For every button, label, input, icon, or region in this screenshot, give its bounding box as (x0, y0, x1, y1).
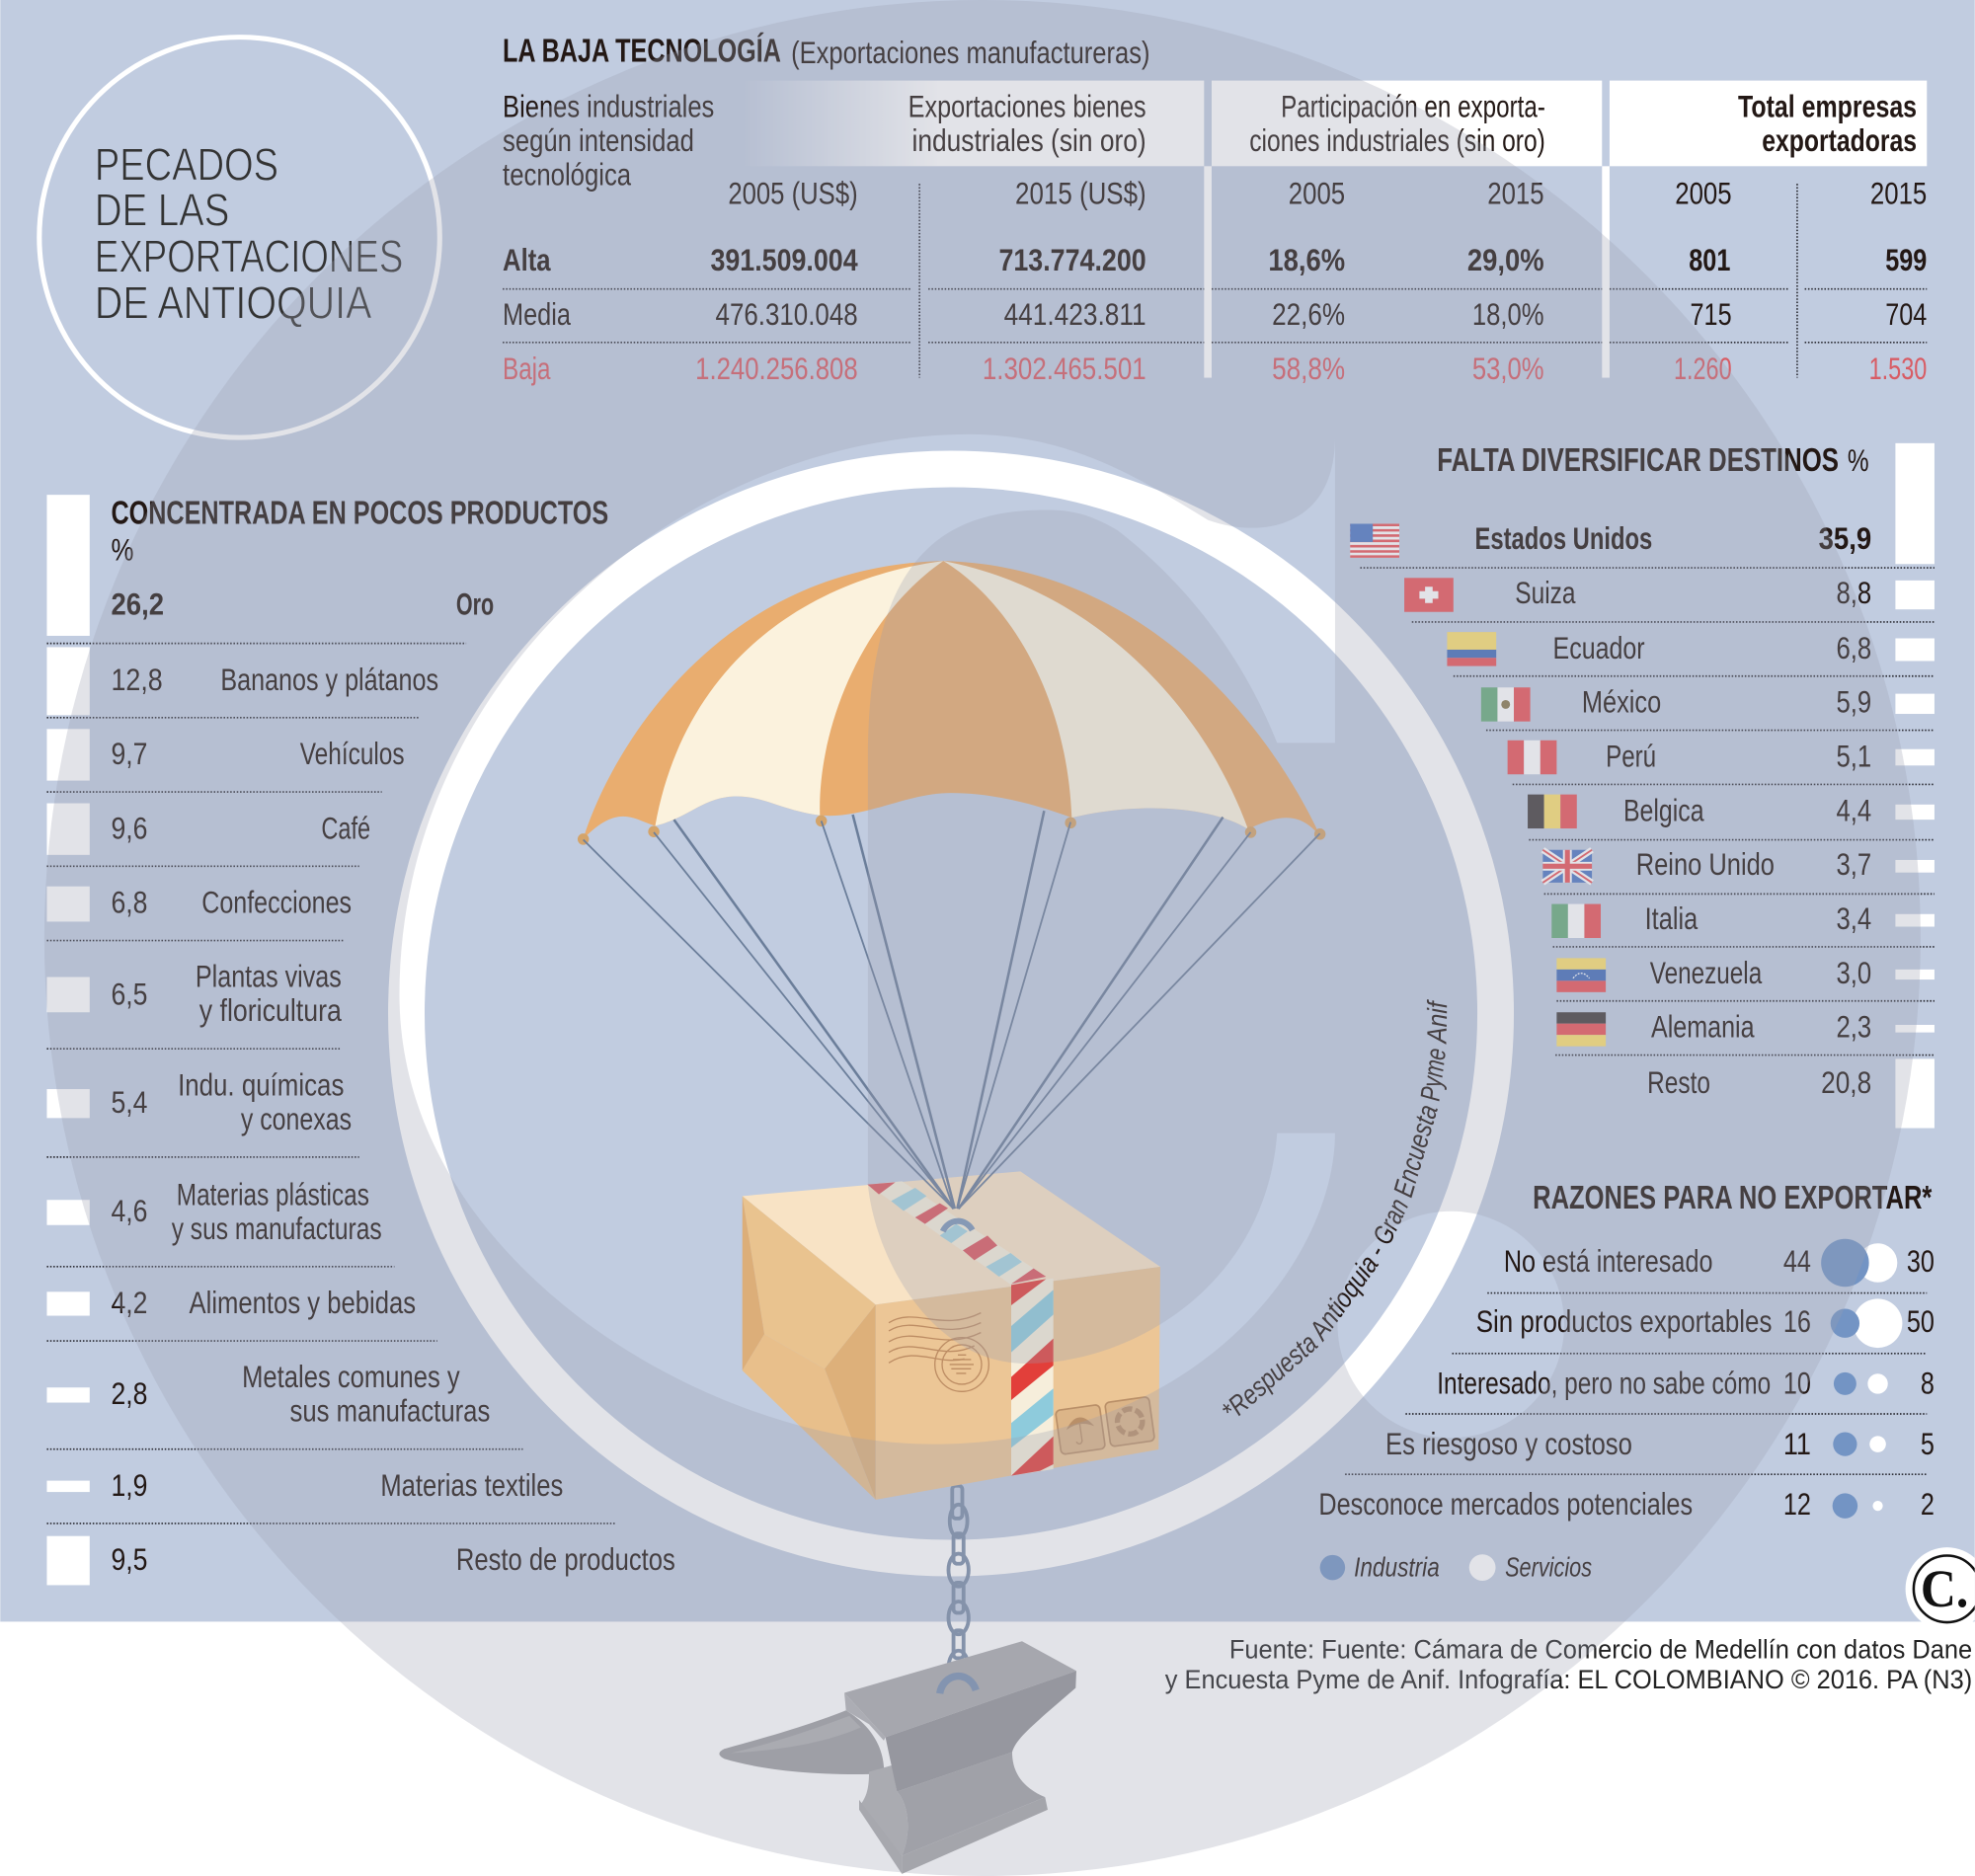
destination values: 8,8 (1836, 576, 1871, 610)
table row: alta: 391.509.004 (710, 243, 858, 277)
illustration: package (743, 1171, 1160, 1500)
legend: Servicios (1505, 1552, 1592, 1583)
flag: Reino Unido (1542, 850, 1592, 883)
survey source note along the ring: - (1361, 1240, 1391, 1262)
destination values: 6,8 (1836, 631, 1871, 665)
table row: baja: 1.240.256.808 (695, 352, 858, 386)
title text: PECADOS (95, 138, 278, 190)
anvil horn highlight (731, 1716, 861, 1754)
illustration: chain (948, 1486, 969, 1685)
anvil horn (719, 1710, 884, 1774)
product values: 1,9 (111, 1468, 147, 1503)
table row: baja: 1.260 (1674, 352, 1732, 386)
table row: media: 22,6% (1272, 297, 1345, 332)
reason values: 10 (1783, 1367, 1811, 1401)
table header text: Total empresas (1738, 90, 1917, 124)
product values: 26,2 (111, 586, 164, 621)
product labels: Resto de productos (456, 1542, 675, 1577)
reason values (1783, 1244, 1935, 1522)
product values: 9,5 (111, 1542, 147, 1577)
destination values: 20,8 (1821, 1065, 1871, 1100)
flag: Italia (1551, 904, 1601, 938)
product labels: Vehículos (300, 737, 405, 771)
white ring around the parachute (407, 469, 1496, 1558)
table years row: 2005 (1289, 177, 1345, 211)
product values: 4,2 (111, 1286, 147, 1320)
destination values: 4,4 (1836, 793, 1871, 827)
anvil base (859, 1797, 1048, 1874)
survey source note along the ring: Encuesta (1387, 1101, 1444, 1201)
flag: Mexico (1481, 687, 1531, 722)
table header cells (740, 81, 1927, 378)
product values: 9,7 (111, 737, 147, 771)
icon: recycle (1105, 1396, 1154, 1446)
destination values: 3,7 (1836, 847, 1871, 882)
flag: Ecuador (1447, 632, 1496, 666)
logo: El Colombiano C. (1906, 1547, 1975, 1630)
table row: media: 476.310.048 (716, 297, 858, 332)
destination labels: Reino Unido (1636, 847, 1775, 882)
illustration: parachute canopy (584, 561, 1320, 839)
table years row: 2015 (US$) (1015, 177, 1146, 211)
parachute anchor dots (578, 816, 1325, 845)
title text (95, 138, 403, 329)
icon: umbrella (1056, 1404, 1105, 1454)
reason labels (1318, 1244, 1772, 1522)
source credit (1165, 1634, 1972, 1694)
table header text: Bienes industriales (503, 90, 714, 124)
survey source note along the ring: Pyme (1415, 1047, 1452, 1103)
destination labels: Suiza (1515, 576, 1576, 610)
heading: productos (111, 494, 608, 567)
title text: DE LAS (95, 184, 229, 235)
table row: baja: 1.530 (1869, 352, 1927, 386)
product labels: y floricultura (199, 993, 342, 1028)
table row: baja: 1.302.465.501 (983, 352, 1146, 386)
reason labels: Sin productos exportables (1476, 1304, 1772, 1339)
heading: destinos: % (1848, 443, 1869, 478)
table header text: tecnológica (503, 157, 632, 192)
table row: baja: 53,0% (1472, 352, 1544, 386)
product labels: Café (321, 811, 370, 845)
logo: El Colombiano C.: C. (1921, 1559, 1968, 1618)
product labels: Metales comunes y (242, 1360, 460, 1394)
table row: media (503, 297, 1927, 332)
reason values: 12 (1783, 1487, 1811, 1522)
table row: alta (503, 243, 1927, 277)
title circle (40, 38, 439, 437)
destination labels: Ecuador (1553, 631, 1645, 665)
flag: Estados Unidos (1350, 523, 1399, 558)
reason labels: Interesado, pero no sabe cómo (1437, 1367, 1771, 1401)
table row: alta: 18,6% (1268, 243, 1345, 277)
table years row: 2015 (1870, 177, 1927, 211)
survey source note along the ring: *Respuesta (1216, 1327, 1323, 1427)
table row: baja: 58,8% (1272, 352, 1345, 386)
reason values: 16 (1783, 1304, 1811, 1339)
reason values: 44 (1783, 1244, 1811, 1279)
flag: Venezuela (1556, 958, 1606, 992)
destination values (1819, 521, 1871, 1100)
anvil waist (859, 1753, 1045, 1856)
destination values: 5,1 (1836, 740, 1871, 774)
survey source note along the ring: Antioquia (1303, 1249, 1384, 1346)
table row: alta: Alta (503, 243, 551, 277)
product labels: Oro (456, 586, 494, 621)
table header text (503, 90, 1917, 192)
product labels: sus manufacturas (290, 1394, 490, 1429)
survey source note along the ring: Gran (1367, 1194, 1414, 1249)
reason labels: Desconoce mercados potenciales (1318, 1487, 1693, 1522)
product labels: Confecciones (201, 885, 352, 919)
flag: Alemania (1556, 1012, 1606, 1047)
product labels: Indu. químicas (178, 1067, 344, 1102)
anvil block (844, 1641, 1076, 1792)
table row: baja (503, 352, 1927, 386)
product labels: Plantas vivas (196, 960, 342, 994)
product values: 6,8 (111, 885, 147, 919)
destination labels: Resto (1647, 1065, 1710, 1100)
product bars (46, 495, 90, 1585)
destination bars (1895, 443, 1935, 1129)
reason labels: Es riesgoso y costoso (1385, 1427, 1632, 1461)
product values: 9,6 (111, 811, 147, 845)
destination values: 2,3 (1836, 1010, 1871, 1045)
hook on package (943, 1221, 973, 1231)
destination labels: Perú (1606, 740, 1656, 774)
product values: 5,4 (111, 1085, 147, 1120)
reason bubbles: servicios (1854, 1243, 1902, 1511)
product labels: y conexas (241, 1102, 352, 1136)
title text: EXPORTACIONES (95, 230, 403, 281)
flag: Belgica (1528, 795, 1577, 828)
table row: media: 18,0% (1472, 297, 1544, 332)
hook on anvil (940, 1677, 976, 1693)
destination values: 35,9 (1819, 521, 1871, 556)
product values: 2,8 (111, 1376, 147, 1411)
table header text: Participación en exporta- (1281, 90, 1545, 124)
illustration: anvil (719, 1641, 1076, 1874)
product values: 6,5 (111, 977, 147, 1012)
panel: concentrada en pocos productos (46, 494, 675, 1585)
destination labels: Belgica (1623, 793, 1704, 827)
destination labels (1474, 521, 1775, 1100)
heading: destinos: FALTA DIVERSIFICAR DESTINOS (1437, 441, 1839, 479)
legend: Industria (1354, 1552, 1440, 1583)
destination labels: Italia (1645, 901, 1698, 936)
product labels (172, 586, 675, 1577)
product labels: Alimentos y bebidas (190, 1286, 416, 1320)
title text: DE ANTIOQUIA (95, 277, 372, 329)
product labels: Materias plásticas (177, 1177, 369, 1212)
table header text: Exportaciones bienes (908, 90, 1146, 124)
destination labels: Estados Unidos (1474, 521, 1652, 556)
product labels: Bananos y plátanos (220, 663, 438, 697)
product labels: Materias textiles (380, 1468, 563, 1503)
reason values: 8 (1921, 1367, 1935, 1401)
legend (1320, 1552, 1592, 1583)
survey source note along the ring (1216, 998, 1453, 1427)
reason values: 50 (1907, 1304, 1935, 1339)
flag: Peru (1508, 741, 1556, 774)
package tape (867, 1181, 1054, 1476)
destination values: 5,9 (1836, 685, 1871, 720)
heading: productos: % (111, 532, 133, 567)
table row: media: 715 (1691, 297, 1732, 332)
table years row (728, 177, 1927, 211)
table heading (503, 32, 1149, 70)
table row: alta: 801 (1689, 243, 1730, 277)
table row: alta: 29,0% (1467, 243, 1544, 277)
reason bubbles: industria (1821, 1239, 1869, 1519)
heading: productos: CONCENTRADA EN POCOS PRODUCTOS (111, 494, 608, 531)
destination labels: México (1582, 685, 1661, 720)
table row: media: Media (503, 297, 571, 332)
product values: 4,6 (111, 1194, 147, 1228)
reason labels: No está interesado (1504, 1244, 1712, 1279)
reason values: 5 (1921, 1427, 1935, 1461)
destination values: 3,4 (1836, 901, 1871, 936)
table heading: LA BAJA TECNOLOGÍA (503, 32, 781, 69)
destination labels: Venezuela (1650, 956, 1763, 990)
product labels: y sus manufacturas (172, 1212, 382, 1246)
table years row: 2005 (1675, 177, 1732, 211)
postmark stamp (889, 1313, 988, 1391)
table header text: ciones industriales (sin oro) (1249, 123, 1545, 158)
title ring (40, 38, 439, 437)
table years row: 2015 (1487, 177, 1544, 211)
destination values: 3,0 (1836, 956, 1871, 990)
table heading: (Exportaciones manufactureras) (791, 36, 1149, 70)
product values: 12,8 (111, 663, 163, 697)
panel: razones para no exportar (1318, 1179, 1935, 1583)
flag: Suiza (1404, 578, 1454, 612)
table row: alta: 713.774.200 (998, 243, 1146, 277)
table header text: industriales (sin oro) (911, 123, 1146, 158)
table row: media: 704 (1885, 297, 1927, 332)
parachute lines (584, 811, 1320, 1209)
table row: baja: Baja (503, 352, 551, 386)
table row: alta: 599 (1885, 243, 1927, 277)
reason values: 2 (1921, 1487, 1935, 1522)
reason values: 11 (1783, 1427, 1811, 1461)
survey source note along the ring: Anif (1422, 998, 1453, 1045)
table years row: 2005 (US$) (728, 177, 858, 211)
product values (111, 586, 164, 1577)
table header text: exportadoras (1762, 123, 1917, 158)
table row: media: 441.423.811 (1004, 297, 1146, 332)
reason values: 30 (1907, 1244, 1935, 1279)
package faces (743, 1171, 1160, 1500)
panel: table baja tecnologia (503, 32, 1927, 386)
panel: falta diversificar destinos (1350, 441, 1935, 1129)
destination labels: Alemania (1651, 1010, 1755, 1045)
table header text: según intensidad (503, 123, 694, 158)
